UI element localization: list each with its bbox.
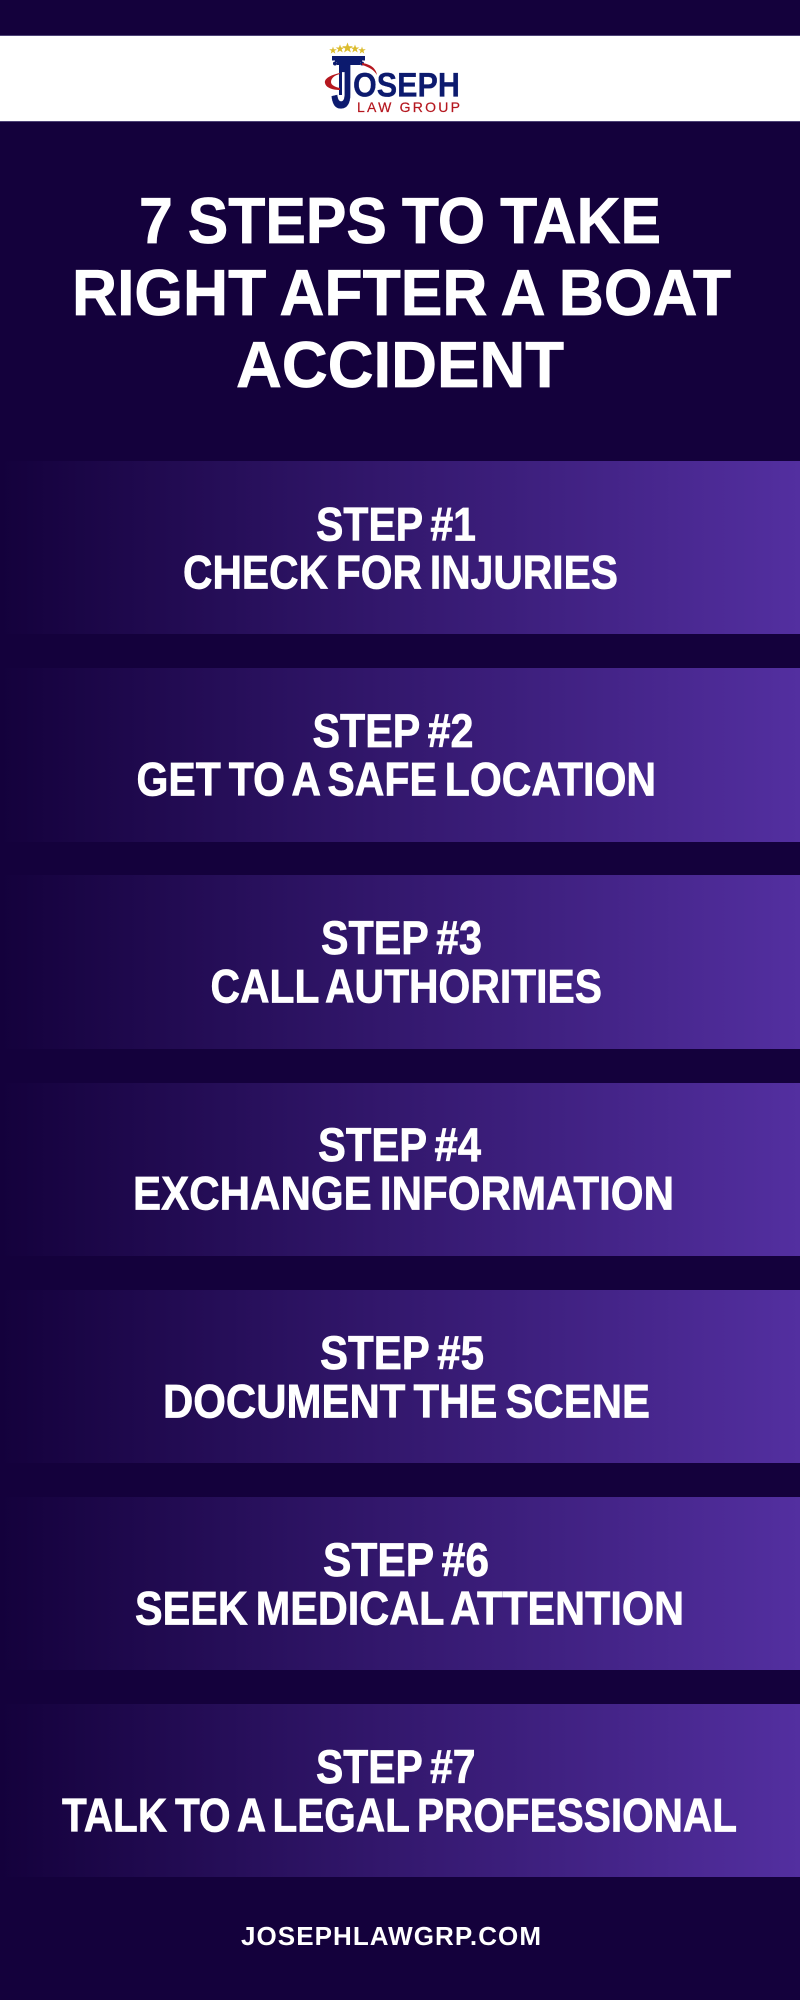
- title: ACCIDENT: [236, 328, 564, 401]
- panel: step 2: GET TO A SAFE LOCATION: [136, 752, 656, 806]
- title: 7 STEPS TO TAKE: [139, 184, 661, 257]
- panel: step 3: STEP #3: [321, 911, 482, 964]
- title: RIGHT AFTER A BOAT: [72, 256, 731, 329]
- footer website: JOSEPHLAWGRP.COM: [241, 1921, 541, 1951]
- icon: five stars: [329, 42, 366, 54]
- panel: step 1: [0, 461, 800, 634]
- panel: step 6: SEEK MEDICAL ATTENTION: [135, 1582, 684, 1634]
- panel: step 5: DOCUMENT THE SCENE: [163, 1374, 650, 1428]
- panel: step 6: [0, 1497, 800, 1670]
- header band with logo: [0, 35, 800, 122]
- panel: step 4: EXCHANGE INFORMATION: [133, 1166, 674, 1220]
- panel: step 1: CHECK FOR INJURIES: [183, 546, 618, 598]
- panel: step 3: [0, 875, 800, 1049]
- panel: step 5: [0, 1290, 800, 1463]
- panel: step 7: [0, 1704, 800, 1877]
- logo wordmark: OSEPH: [353, 66, 460, 104]
- panel: step 5: STEP #5: [320, 1326, 484, 1379]
- panel: step 7: STEP #7: [316, 1740, 476, 1793]
- icon: column capital: [332, 56, 365, 95]
- panel: step 6: STEP #6: [323, 1533, 489, 1586]
- panel: step 3: CALL AUTHORITIES: [210, 960, 602, 1012]
- title: [72, 184, 731, 401]
- logo tagline: LAW GROUP: [357, 99, 460, 115]
- panel: step 4: [0, 1083, 800, 1256]
- panel: step 2: [0, 668, 800, 842]
- logo wordmark: J: [331, 53, 353, 122]
- logo: Joseph Law Group: [325, 42, 460, 122]
- panel: step 2: STEP #2: [312, 704, 474, 757]
- icon: red swoosh: [325, 63, 377, 90]
- panel: step 4: STEP #4: [318, 1118, 481, 1171]
- panel: step 1: STEP #1: [316, 498, 476, 550]
